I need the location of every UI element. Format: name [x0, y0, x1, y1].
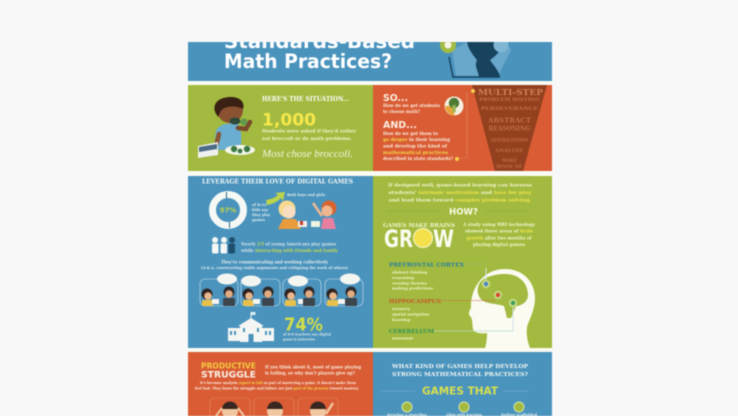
text: and question: mathematical practices: [383, 151, 449, 156]
heading: PRODUCTIVE: [201, 362, 256, 371]
funnel labels: PROBLEM SOLVING: [479, 97, 540, 103]
text: survey description: eat broccoli or do math problems.: [262, 137, 352, 142]
heading: LEVERAGE THEIR LOVE OF DIGITAL GAMES: [202, 178, 353, 186]
text: both boys and girls: Both boys and girls: [287, 193, 325, 197]
text: analysis: It's because analysis expect to fail as part of mastering a game. It doesn't make them: [200, 380, 357, 385]
text: MRI study: [462, 223, 535, 248]
icon: head silhouette with brain: [469, 268, 535, 348]
icon: school: [228, 312, 274, 342]
text: intro: If designed well, game-based learning can harness: [388, 183, 532, 189]
chart: 97% donut: 97%: [220, 206, 236, 214]
text: communicating: [201, 260, 348, 270]
text: so question: to choose math?: [383, 110, 420, 115]
text: game trait labels: [387, 413, 537, 416]
label: cerebellum: movement: [392, 336, 413, 340]
icon: boy and girl playing: [278, 200, 336, 229]
page sheet: [188, 42, 552, 416]
icon: three people: [212, 237, 235, 254]
icons: game traits: [402, 402, 524, 412]
funnel labels: MULTI-STEP: [478, 87, 543, 97]
heading: games that: GAMES THAT: [422, 385, 498, 398]
funnel labels: ANALYZE: [494, 148, 523, 154]
panel: so and: [371, 85, 552, 171]
dotted connector: [458, 92, 467, 158]
panel: what kind of games: [371, 352, 552, 416]
label: hippocampus: HIPPOCAMPUS: [389, 299, 441, 305]
text: question: If you think about it, most of game playing: [265, 366, 361, 370]
heading: STRONG MATHEMATICAL PRACTICES?: [392, 372, 529, 378]
text: so question: How do we get students: [383, 104, 441, 109]
text: grow with lemon: GR: [384, 225, 413, 253]
text: MRI study: A study using MRI technology: [462, 223, 535, 228]
funnel: [472, 85, 547, 171]
icon: broccoli plate: [225, 145, 255, 155]
heading: how: HOW?: [449, 208, 478, 218]
icon row: struggling players: [210, 398, 338, 416]
heading: HERE'S THE SITUATION...: [262, 95, 349, 103]
text: 2/3 of young Americans: [240, 243, 338, 254]
heading: WHAT KIND OF GAMES HELP DEVELOP: [391, 364, 529, 370]
label: hippocampus: [389, 299, 495, 322]
text: analysis: feel bad. They know the struggle and failure are just part of the process toward mastery.: [195, 386, 360, 390]
text: games make brains: GAMES MAKE BRAINS: [383, 223, 455, 229]
text: donut caption: kids say: [252, 208, 269, 212]
title: [224, 41, 414, 69]
funnel labels: ABSTRACT: [487, 118, 532, 125]
text: so question: SO...: [383, 93, 408, 104]
conversation 1: [200, 274, 238, 306]
text: survey description: Students were asked if they'd rather: [262, 130, 357, 134]
conversation 4: [325, 274, 363, 306]
label: cerebellum: CEREBELLUM: [389, 329, 434, 335]
label: cerebellum: [389, 329, 513, 340]
text: intro: [388, 183, 533, 204]
panel: digital games: [188, 176, 371, 348]
player card 3: [298, 398, 338, 416]
text: question: is failing, so why don't players give up?: [265, 372, 355, 376]
text: 2/3 of young Americans: while interacting with friends and family: [240, 249, 338, 254]
statistic: 74%: 74%: [284, 315, 323, 336]
label: hippocampus: memory: [392, 306, 411, 311]
title: Math Practices?: [224, 50, 392, 73]
icon: child eating broccoli: [198, 97, 255, 158]
label: prefrontal cortex: abstract thinking: [392, 270, 427, 274]
label: prefrontal cortex: creating theories: [392, 280, 428, 286]
text: and question: described in state standards?: [383, 157, 453, 162]
icon: stars: [455, 89, 475, 161]
arrow: [266, 192, 285, 205]
funnel labels: PERSEVERANCE: [481, 106, 538, 112]
text: donut caption: of K-12: [252, 203, 267, 207]
text: grow with lemon: W: [433, 225, 454, 253]
text: MRI study: showed three areas of brain: [465, 230, 534, 234]
statistic: 1,000: 1,000: [262, 110, 316, 130]
funnel labels: GENERALIZATION: [491, 139, 528, 144]
label: prefrontal cortex: [389, 262, 486, 290]
label: prefrontal cortex: reasoning: [392, 275, 414, 280]
text: communicating: They're communicating and working collectively: [221, 260, 328, 265]
text: and question: and develop the kind of: [383, 144, 448, 149]
panel: productive struggle: [188, 352, 371, 416]
funnel labels: REASONING: [488, 126, 530, 133]
text: so question: [383, 93, 441, 115]
panel: the situation: [188, 85, 371, 171]
text: MRI study: playing digital games: [473, 243, 526, 248]
text: communicating: (A.K.A. constructing viable arguments and critiquing the work of others): [201, 265, 348, 270]
text: donut caption: they play: [252, 213, 271, 217]
icon: broccoli badge: [444, 96, 464, 116]
label: hippocampus: spatial navigation: [392, 312, 429, 316]
heading: STRUGGLE: [201, 370, 256, 380]
panel: title header: [187, 41, 553, 82]
text: K-8 teachers: of K-8 teachers use digital: [283, 332, 331, 336]
text: analysis: [195, 380, 360, 390]
text: grow with lemon: [384, 225, 454, 253]
text: K-8 teachers: games in instruction: [283, 336, 315, 342]
text: question: [265, 366, 361, 376]
player card 1: [210, 398, 250, 416]
title: Standards-Based: [224, 30, 415, 53]
player card 2: [254, 398, 294, 416]
label: prefrontal cortex: making predictions: [392, 286, 434, 290]
text: intro: students' intrinsic motivation and love for play: [388, 190, 533, 196]
text: and question: go deeper in their learning: [383, 138, 450, 143]
chart: 97% donut: [212, 192, 244, 228]
icon row: four conversations: [200, 274, 363, 306]
text: 2/3 of young Americans: Nearly 2/3 of young Americans play games: [241, 243, 336, 248]
conversation 2: [241, 276, 280, 306]
conversation 3: [283, 276, 321, 306]
text: intro: and lead them toward complex problem solving.: [388, 198, 532, 204]
text: and question: [383, 120, 453, 162]
label: prefrontal cortex: PREFRONTAL CORTEX: [389, 262, 465, 268]
text: MRI study: growth after two months of: [466, 236, 533, 242]
heading: [391, 364, 529, 378]
text: conclusion: Most chose broccoli.: [261, 149, 353, 160]
text: survey description: [262, 130, 357, 142]
icon: stack of books: [198, 142, 218, 158]
text: K-8 teachers: [283, 332, 331, 342]
text: donut caption: [252, 203, 271, 222]
text: and question: AND...: [383, 120, 417, 131]
funnel labels: SENSE OF: [496, 164, 522, 169]
label: hippocampus: learning: [392, 317, 410, 322]
panel: games make brains grow: [371, 176, 552, 348]
text: donut caption: games: [252, 218, 265, 222]
funnel labels: [478, 87, 543, 169]
funnel labels: MAKE: [502, 158, 517, 163]
icon: student at laptop silhouette: [440, 37, 511, 77]
text: and question: How do we get them to: [383, 132, 438, 137]
heading: [201, 362, 256, 380]
